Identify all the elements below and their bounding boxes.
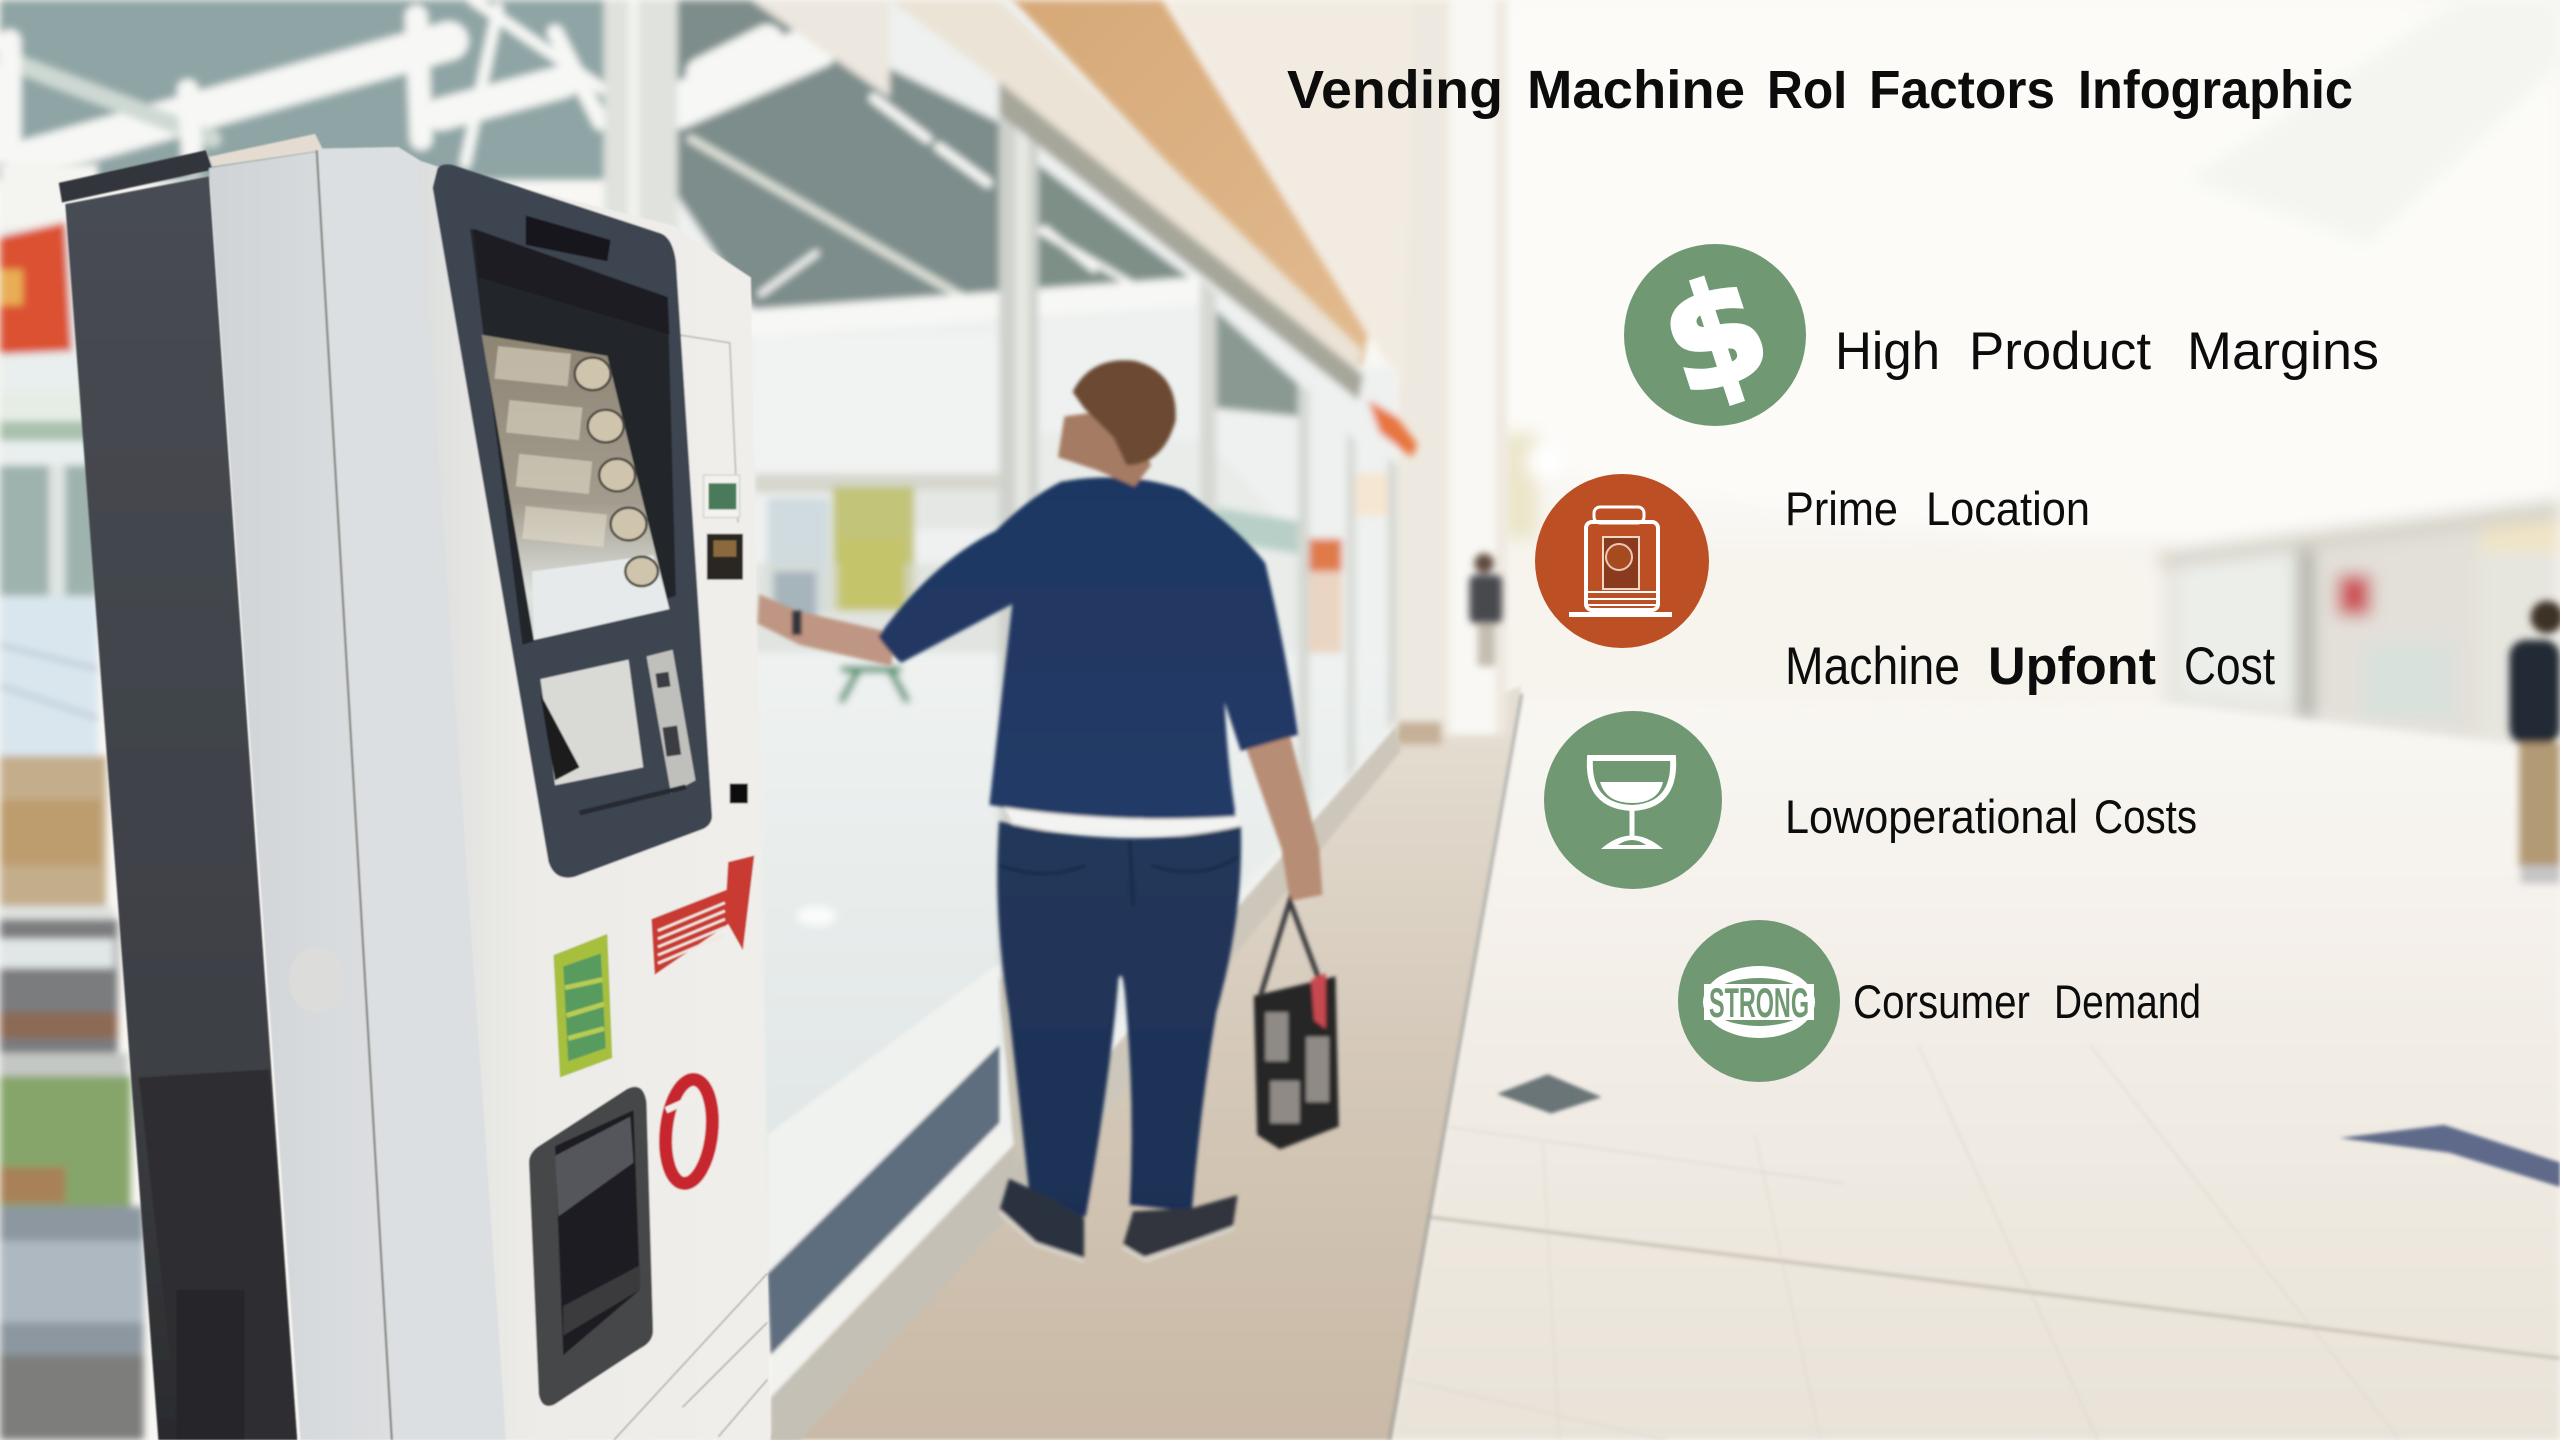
green QR sticker bbox=[553, 934, 612, 1078]
machine dark side panel bbox=[65, 176, 297, 1440]
glass storefront with blurred mall interior bbox=[0, 0, 1417, 1306]
label: low operational costs: Costs bbox=[2094, 790, 2197, 843]
label: prime location: Location bbox=[1926, 482, 2090, 535]
green bench bbox=[841, 669, 908, 702]
floor tile lines bbox=[1404, 1045, 2560, 1440]
label: high product margins: High bbox=[1835, 322, 1940, 381]
title: Machine bbox=[1527, 60, 1745, 120]
machine bezel bbox=[433, 164, 712, 878]
jeans bbox=[997, 821, 1241, 1216]
machine white front bbox=[418, 160, 771, 1440]
arm reaching toward machine bbox=[758, 594, 895, 666]
interior floor bbox=[754, 653, 1396, 1273]
icon: red arrow sticker bbox=[651, 856, 754, 975]
shirt hem bbox=[999, 797, 1241, 838]
factor: prime location bbox=[1535, 474, 2090, 648]
interior wall band and shops bbox=[754, 335, 999, 482]
distant shopper bbox=[1469, 553, 1502, 666]
label: consumer demand: Corsumer bbox=[1853, 975, 2030, 1028]
machine light grey panels bbox=[209, 152, 392, 1440]
label: high product margins: Product bbox=[1969, 322, 2151, 381]
card reader bbox=[647, 650, 696, 793]
icon: orange circle with coffee machine bbox=[1535, 474, 1709, 648]
product selection buttons bbox=[575, 358, 658, 586]
window frames bbox=[604, 0, 1398, 1061]
title: Infographic bbox=[2078, 60, 2353, 120]
label: consumer demand: Demand bbox=[2054, 975, 2201, 1028]
small display bbox=[540, 660, 643, 785]
label: low operational costs: Lowoperational bbox=[1785, 790, 2078, 843]
product screen bbox=[482, 335, 669, 640]
label: machine upfront cost: Upfont bbox=[1988, 637, 2156, 696]
stickers bbox=[704, 475, 748, 803]
icon: green circle with strong badge bbox=[1678, 920, 1840, 1082]
factor: low operational costs bbox=[1544, 711, 2197, 889]
label: machine upfront cost: Cost bbox=[2184, 637, 2275, 696]
title: Vending bbox=[1287, 60, 1503, 120]
terrazzo walkway bbox=[767, 686, 1522, 1440]
title: Factors bbox=[1869, 60, 2055, 120]
icon: dollar sign on green circle: $ bbox=[1644, 244, 1787, 429]
label: prime location: Prime bbox=[1785, 482, 1898, 535]
interior steel roof panels bbox=[0, 0, 604, 180]
title: RoI bbox=[1767, 60, 1847, 120]
product retrieval door bbox=[529, 1087, 653, 1406]
vending machine bbox=[59, 134, 771, 1440]
sweater bbox=[878, 477, 1298, 819]
factor: high product margins bbox=[1624, 244, 2379, 429]
label: machine upfront cost: Machine bbox=[1785, 637, 1960, 696]
head and hair bbox=[1058, 408, 1151, 487]
window sill bbox=[767, 727, 1401, 1440]
icon: green circle with glass bbox=[1544, 711, 1722, 889]
floor markers bbox=[1497, 1074, 2560, 1187]
label lines bbox=[614, 1273, 767, 1440]
left foreground: red sign and display shelves bbox=[0, 163, 144, 1440]
shoes bbox=[999, 1179, 1084, 1260]
shopper bbox=[758, 360, 1339, 1260]
icon: red recycling ring bbox=[661, 1077, 717, 1186]
shopping bag bbox=[1254, 901, 1339, 1149]
column and wood fascia bbox=[1007, 0, 1507, 744]
label: high product margins: Margins bbox=[2187, 322, 2379, 381]
background shoppers bbox=[1469, 553, 2560, 883]
right forearm and hand bbox=[1244, 735, 1322, 901]
roof trusses bbox=[0, 0, 1200, 323]
shopper at right edge bbox=[2509, 601, 2560, 883]
icon: green circle with strong badge: STRONG bbox=[1709, 979, 1809, 1026]
factor: consumer demand bbox=[1678, 920, 2201, 1082]
machine top trim bbox=[209, 134, 323, 167]
